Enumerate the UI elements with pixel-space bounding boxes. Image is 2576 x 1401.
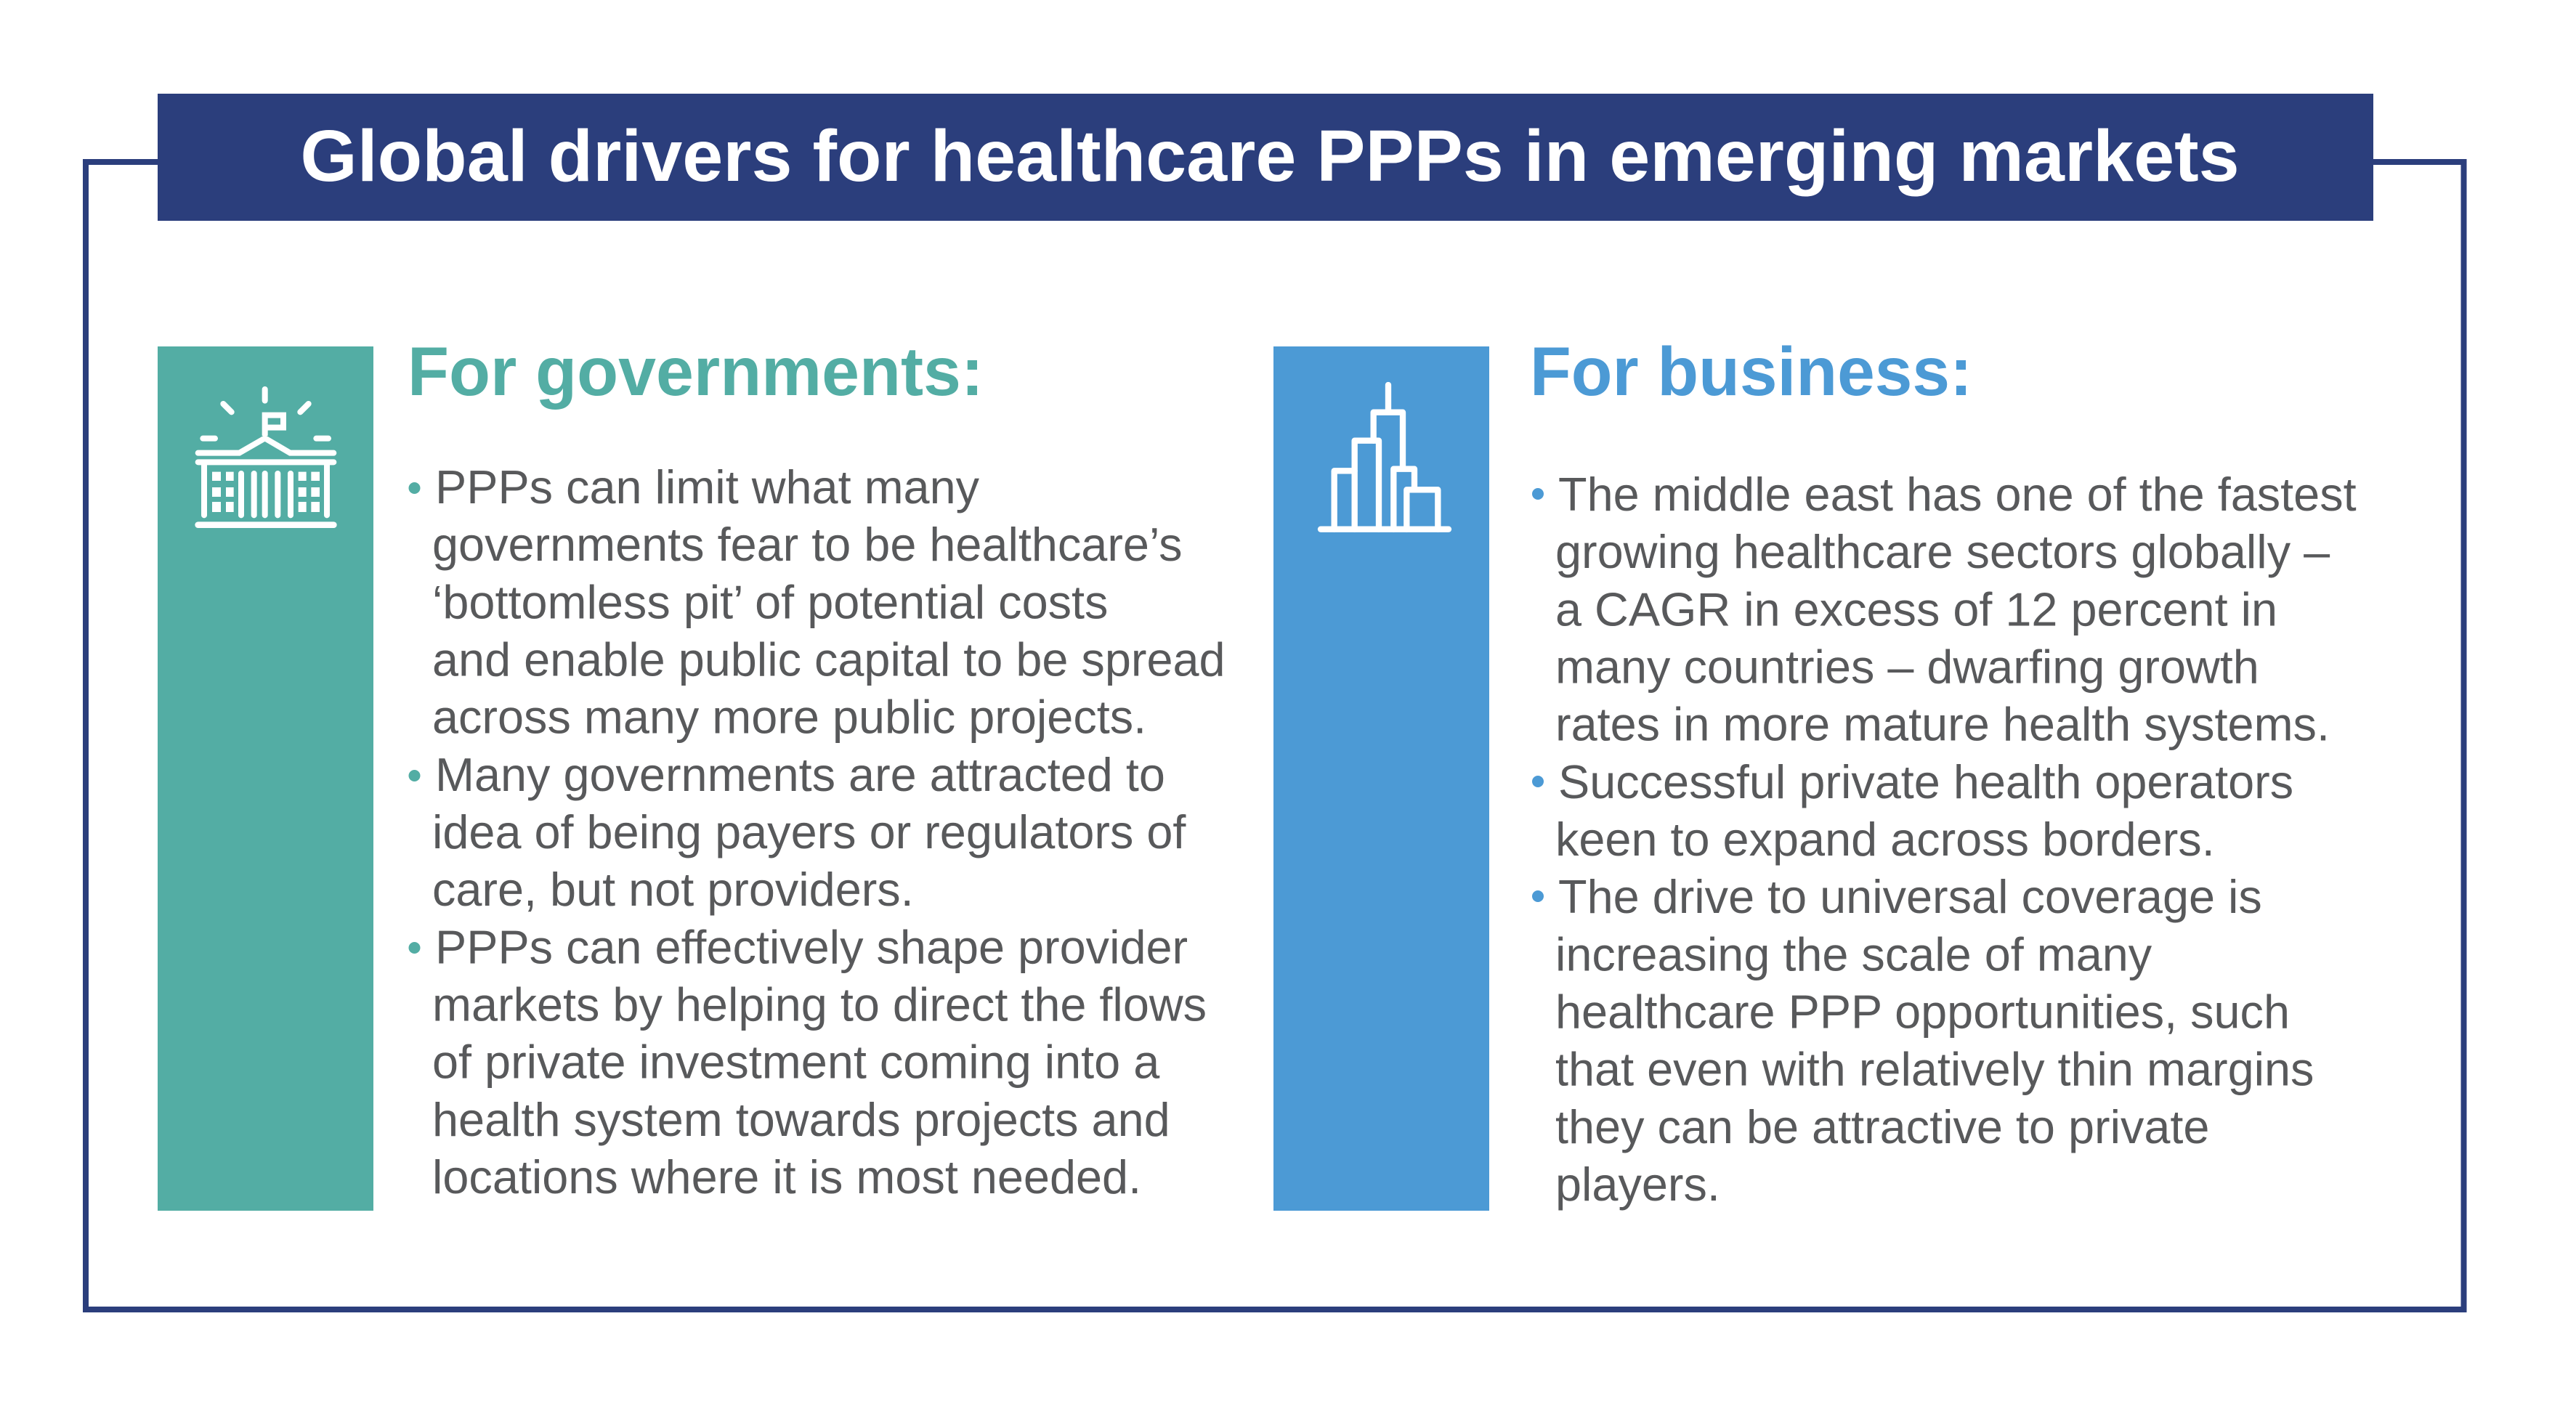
text block: governments bullets: across many more public projects. bbox=[432, 691, 1146, 744]
icon: city skyline bbox=[1321, 385, 1449, 529]
text block: business bullets: rates in more mature health systems. bbox=[1555, 698, 2330, 751]
text block: governments bullets: PPPs can effectively shape provider bbox=[435, 920, 1188, 973]
text block: governments bullets: care, but not providers. bbox=[432, 863, 914, 916]
text block: business bullets: The drive to universal coverage is bbox=[1558, 870, 2262, 923]
text block: business bullets: keen to expand across borders. bbox=[1555, 813, 2215, 866]
title banner bbox=[158, 94, 2373, 221]
panel: for governments sidebar bbox=[158, 346, 373, 1211]
text block: business bullets bbox=[1532, 468, 2357, 1211]
text block: business bullets: Successful private health operators bbox=[1558, 755, 2293, 808]
text block: business bullets: that even with relatively thin margins bbox=[1555, 1043, 2314, 1096]
text block: business bullets: The middle east has one of the fastest bbox=[1558, 468, 2357, 521]
heading: for business: For business: bbox=[1530, 333, 1972, 410]
text block: governments bullets: health system towards projects and bbox=[432, 1093, 1170, 1146]
text block: business bullets: growing healthcare sectors globally – bbox=[1555, 525, 2330, 578]
text block: business bullets: they can be attractive to private bbox=[1555, 1100, 2209, 1153]
text block: governments bullets bbox=[408, 460, 1226, 1203]
text block: governments bullets: and enable public capital to be spread bbox=[432, 633, 1226, 686]
text block: governments bullets: markets by helping to direct the flows bbox=[432, 978, 1207, 1031]
text block: governments bullets: idea of being payers or regulators of bbox=[432, 805, 1186, 858]
title: Global drivers for healthcare PPPs in emerging markets bbox=[300, 115, 2240, 197]
text block: governments bullets: locations where it is most needed. bbox=[432, 1150, 1141, 1203]
text block: governments bullets: ‘bottomless pit’ of potential costs bbox=[432, 575, 1108, 628]
text block: business bullets: healthcare PPP opportunities, such bbox=[1555, 985, 2290, 1039]
text block: governments bullets: PPPs can limit what many bbox=[435, 460, 980, 513]
icon: government building bbox=[198, 389, 333, 525]
text block: business bullets: increasing the scale of many bbox=[1555, 927, 2152, 980]
text block: governments bullets: Many governments are attracted to bbox=[435, 748, 1165, 801]
heading: for governments: For governments: bbox=[408, 333, 984, 410]
text block: business bullets: players. bbox=[1555, 1158, 1720, 1211]
outer frame bbox=[86, 162, 2464, 1309]
text block: governments bullets: governments fear to be healthcare’s bbox=[432, 518, 1183, 571]
text block: business bullets: many countries – dwarfing growth bbox=[1555, 641, 2259, 693]
panel: for business sidebar bbox=[1273, 346, 1489, 1211]
text block: business bullets: a CAGR in excess of 12 percent in bbox=[1555, 582, 2277, 635]
text block: governments bullets: of private investment coming into a bbox=[432, 1036, 1160, 1089]
